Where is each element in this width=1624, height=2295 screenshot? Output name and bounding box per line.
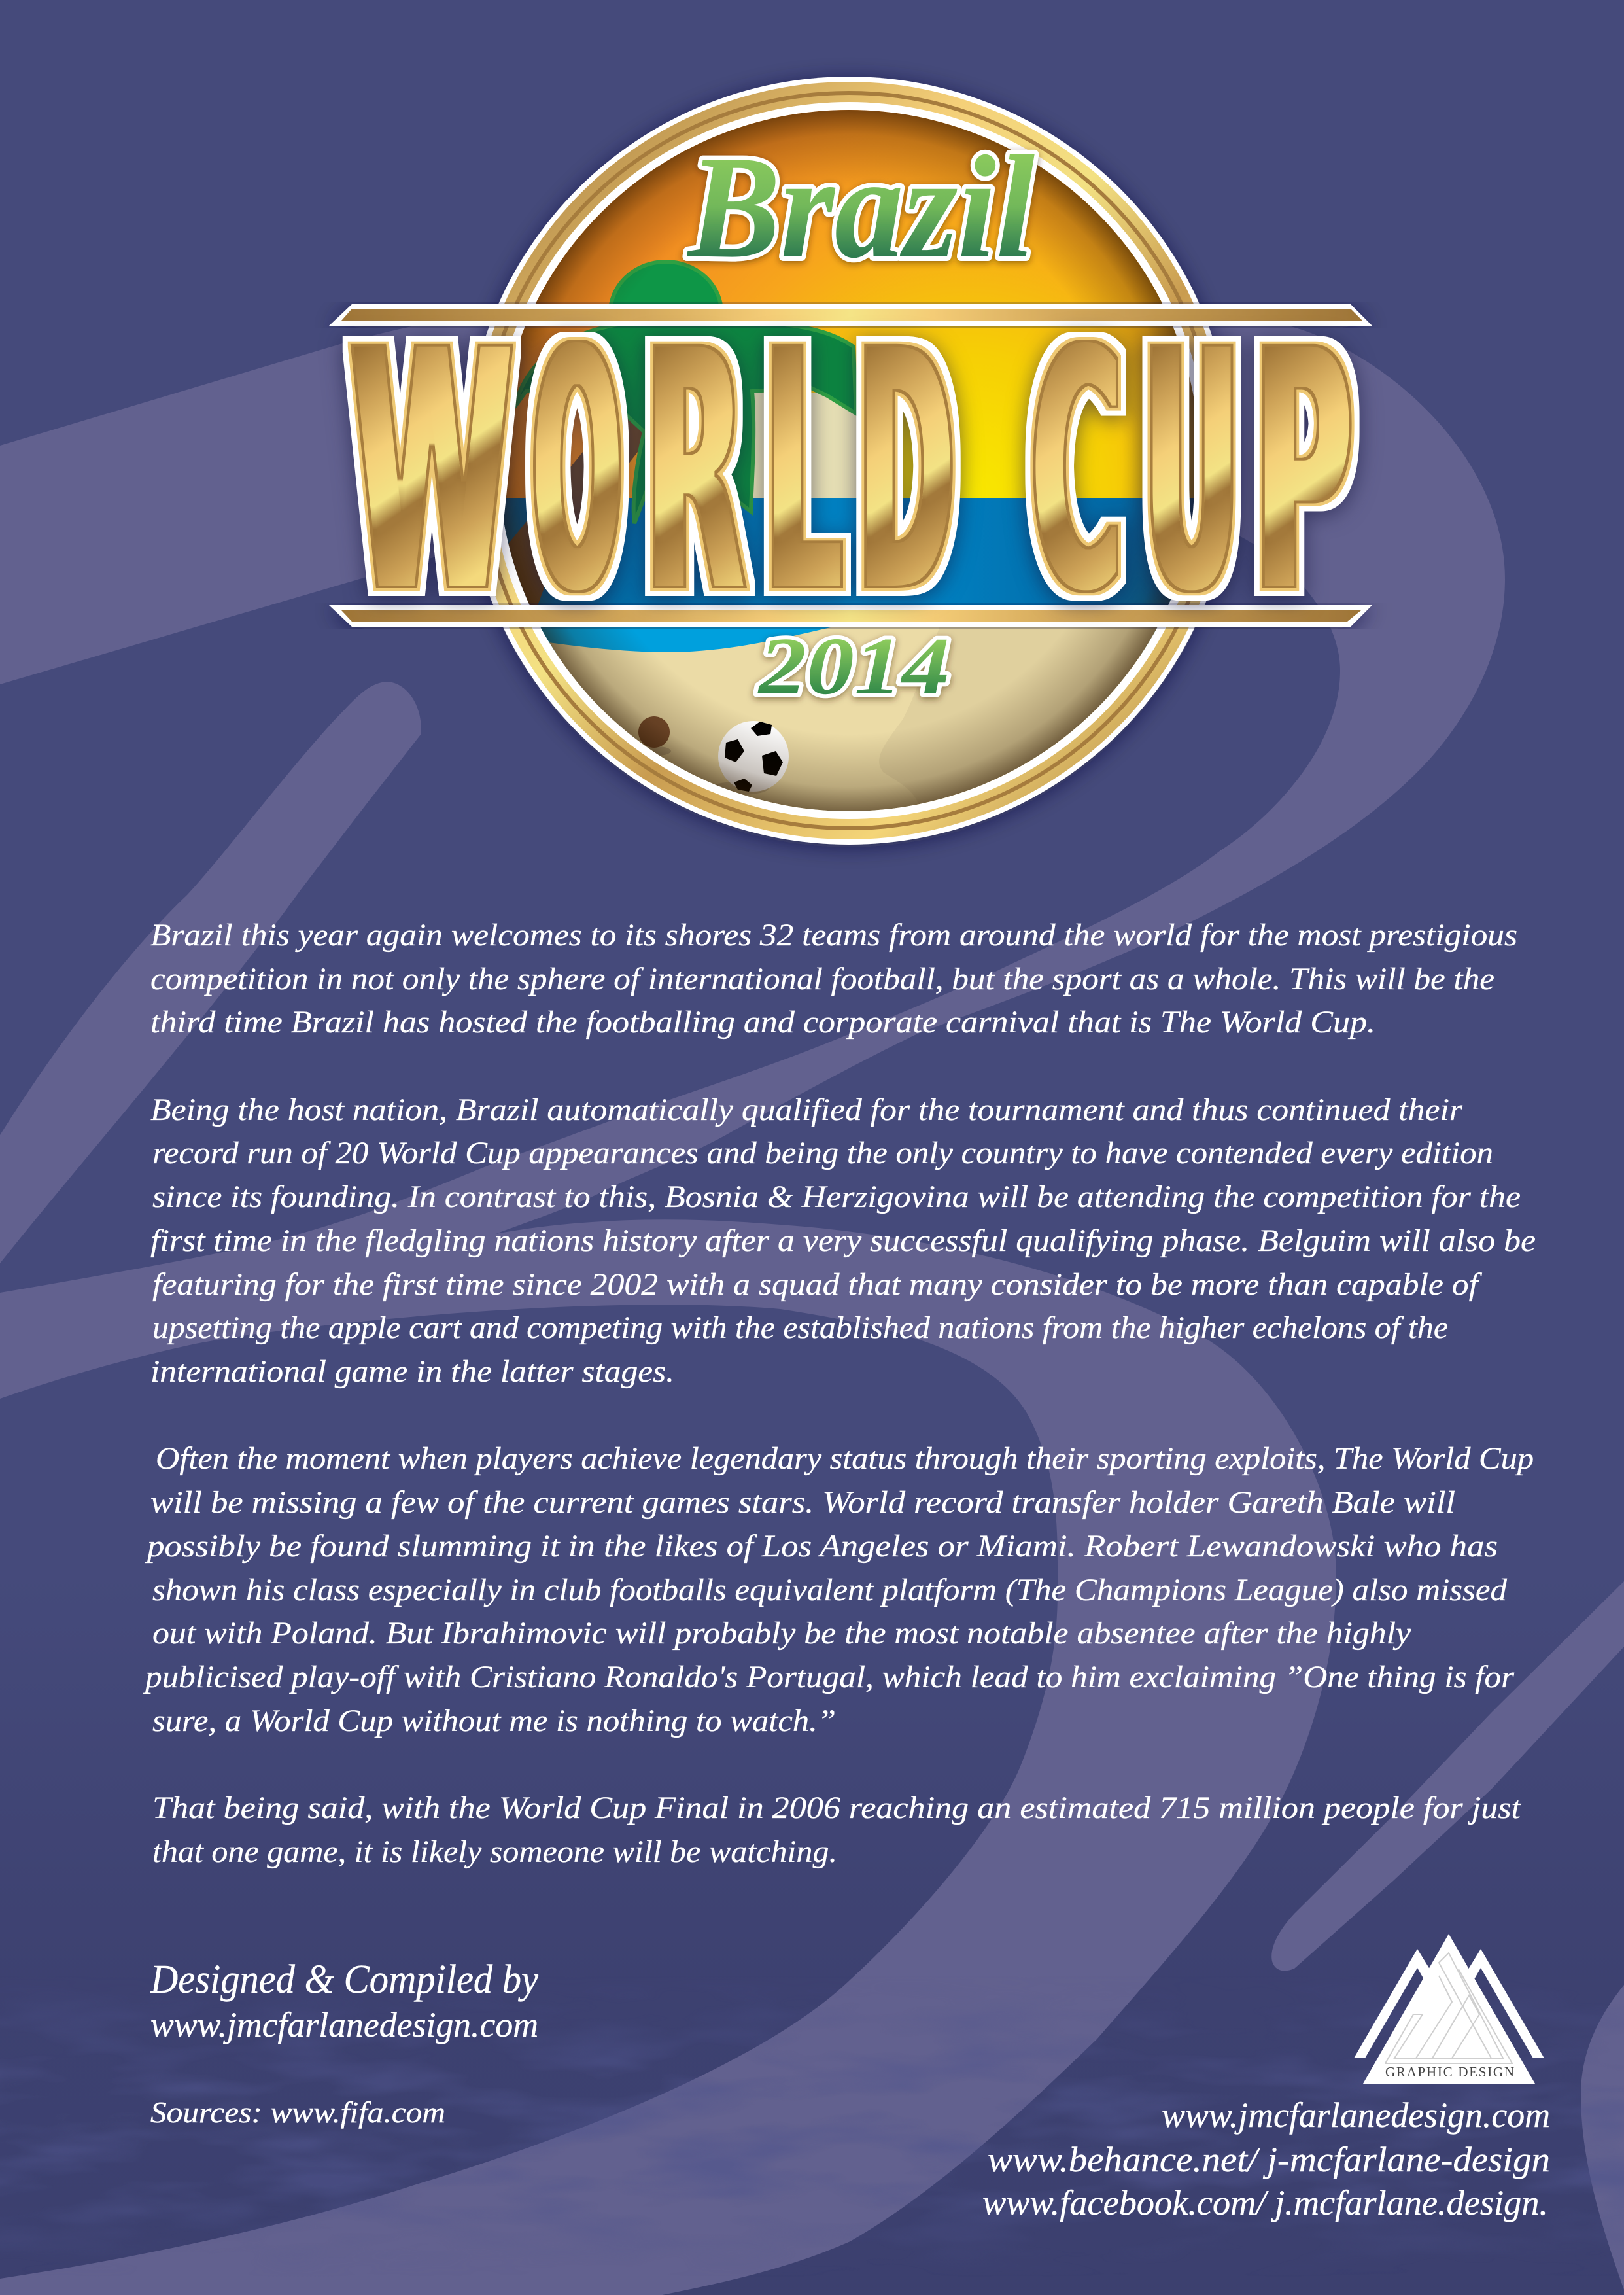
credits: www.jmcfarlanedesign.com	[150, 2005, 538, 2044]
title: WORLD CUP: W	[351, 277, 513, 667]
paragraph 1: third time Brazil has hosted the footballing and corporate carnival that is The World Cup.	[150, 1005, 1375, 1040]
sand dune	[879, 622, 1203, 824]
palm trunk	[487, 376, 664, 654]
paragraph 3: Often the moment when players achieve legendary status through their sporting exploits, The World Cup	[156, 1441, 1534, 1476]
lower gold band	[329, 605, 1372, 627]
logo caption: GRAPHIC DESIGN	[1385, 2064, 1514, 2080]
inner vignette	[498, 110, 1200, 811]
title: WORLD CUP	[351, 277, 1353, 667]
title: WORLD CUP: U	[1144, 277, 1239, 667]
upper gold band	[329, 304, 1372, 326]
paragraph 4	[152, 1791, 1522, 1869]
credits: Designed & Compiled by	[150, 1957, 538, 2002]
swirl: lower right stroke	[1271, 1581, 1624, 1971]
title: WORLD CUP: R	[646, 277, 745, 667]
swirl: left stroke	[0, 682, 421, 1263]
shore water	[497, 605, 1203, 654]
paragraph 1: competition in not only the sphere of international football, but the sport as a whole. This will be the	[150, 962, 1494, 996]
paragraph 4: That being said, with the World Cup Final in 2006 reaching an estimated 715 million people for just	[152, 1791, 1522, 1825]
paragraph 2: upsetting the apple cart and competing with the established nations from the higher echelons of the	[152, 1310, 1448, 1345]
lower background tint	[0, 1570, 1624, 2295]
credits	[150, 1957, 538, 2044]
badge ring	[465, 77, 1233, 845]
logo: World Cup badge	[329, 77, 1372, 845]
paragraph 2: featuring for the first time since 2002 with a squad that many consider to be more than capable of	[152, 1267, 1482, 1302]
stadium photo tint	[0, 2039, 1624, 2221]
paragraph 3: will be missing a few of the current games stars. World record transfer holder Gareth Bale will	[150, 1485, 1455, 1520]
paragraph 1: Brazil this year again welcomes to its shores 32 teams from around the world for the most prestigious	[150, 918, 1517, 953]
paragraph 2	[150, 1093, 1536, 1389]
designer logo	[1354, 1934, 1544, 2084]
sand	[497, 620, 1203, 824]
paragraph 3	[143, 1441, 1534, 1738]
title: WORLD CUP: L	[765, 277, 842, 667]
paragraph 2: since its founding. In contrast to this, Bosnia & Herzigovina will be attending the competition for the	[152, 1180, 1521, 1214]
title: WORLD CUP: O	[532, 277, 622, 667]
paragraph 1	[150, 918, 1517, 1040]
badge scene	[487, 105, 1210, 824]
paragraph 2: first time in the fledgling nations history after a very successful qualifying phase. Belguim will also be	[150, 1223, 1536, 1258]
title: WORLD CUP: D	[858, 277, 954, 667]
infographic poster: P	[1254, 277, 1353, 667]
paragraph 2: international game in the latter stages.	[150, 1354, 674, 1389]
paragraph 3: out with Poland. But Ibrahimovic will probably be the most notable absentee after the highly	[152, 1616, 1411, 1651]
contact links: www.facebook.com/ j.mcfarlane.design.	[982, 2183, 1548, 2222]
palm leaves	[515, 262, 856, 523]
logo monogram lines	[1385, 1953, 1512, 2063]
sky	[491, 105, 1210, 500]
sea	[491, 498, 1210, 655]
sources: Sources: www.fifa.com	[150, 2095, 445, 2129]
contact links	[982, 2095, 1550, 2222]
paragraph 2: Being the host nation, Brazil automatically qualified for the tournament and thus continued their	[150, 1093, 1462, 1127]
heading: 2014: 2014	[757, 622, 950, 712]
paragraph 3: publicised play-off with Cristiano Ronaldo's Portugal, which lead to him exclaiming ”One thing is for	[143, 1660, 1514, 1694]
paragraph 2: record run of 20 World Cup appearances and being the only country to have contended every edition	[152, 1136, 1493, 1170]
football	[710, 721, 789, 795]
paragraph 4: that one game, it is likely someone will be watching.	[152, 1834, 837, 1869]
paragraph 3: shown his class especially in club footballs equivalent platform (The Champions League) also missed	[152, 1573, 1508, 1607]
swirl: right edge blob	[1581, 1985, 1624, 2290]
coconut in palm	[668, 361, 717, 411]
coconut on beach	[638, 716, 671, 756]
contact links: www.jmcfarlanedesign.com	[1162, 2095, 1550, 2135]
body text	[143, 918, 1536, 1869]
title: WORLD CUP: C	[1031, 277, 1122, 667]
paragraph 3: possibly be found slumming it in the likes of Los Angeles or Miami. Robert Lewandowski who has	[145, 1529, 1498, 1564]
contact links: www.behance.net/ j-mcfarlane-design	[988, 2140, 1550, 2179]
heading: Brazil: Brazil	[686, 125, 1035, 289]
paragraph 3: sure, a World Cup without me is nothing to watch.”	[152, 1704, 836, 1738]
